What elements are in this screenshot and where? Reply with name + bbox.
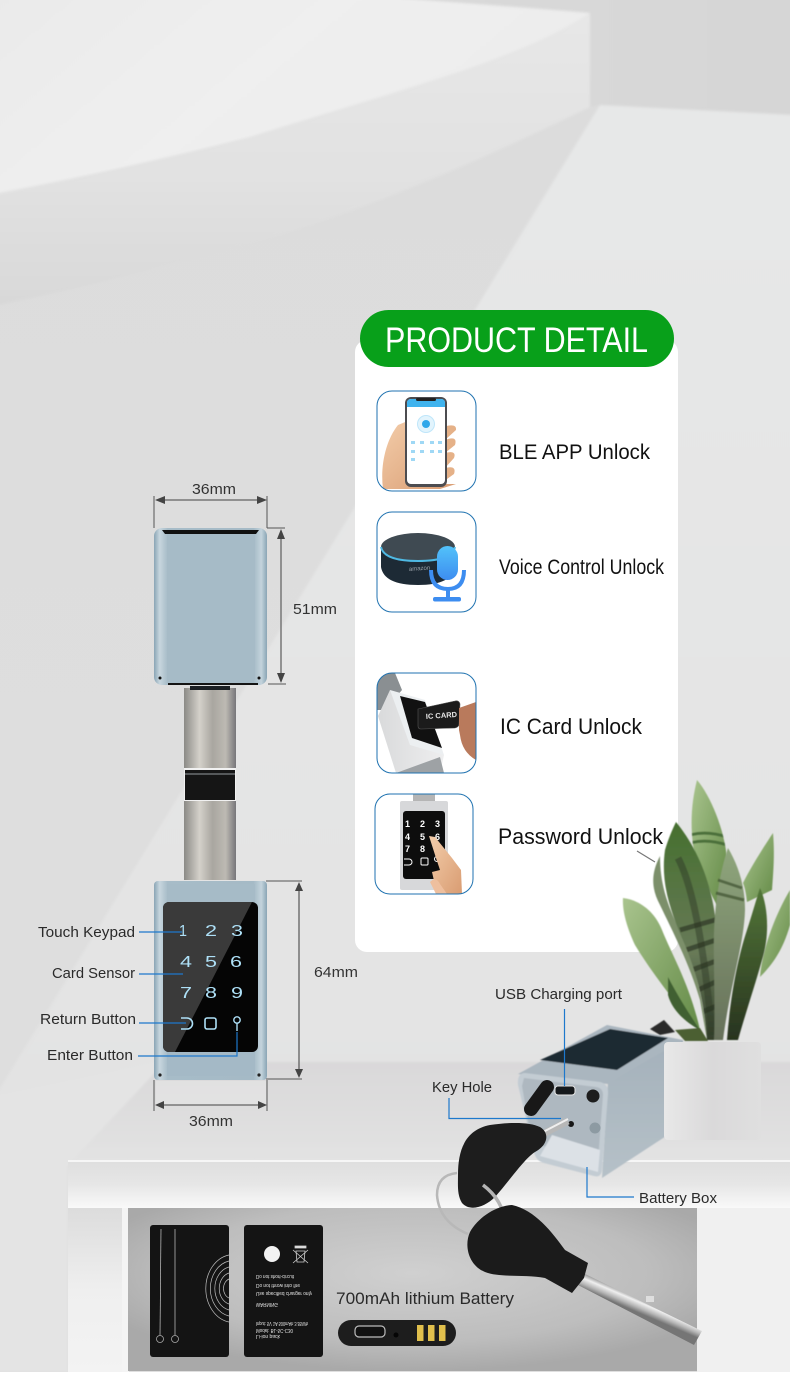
icon: finger on keypad: 6 [435,832,440,842]
Return Button callout: Return Button [40,1011,136,1028]
callout: Battery Box: Battery Box [639,1191,718,1207]
icon: finger on keypad: 3 [435,819,440,829]
keypad lock: upper module, cylinder and lower module [154,528,267,1105]
icon: smart speaker with microphone [377,512,476,612]
dimension: top width 36mm [154,482,267,528]
flip cover handle [531,1087,547,1109]
item: IC card unlock [377,673,643,773]
reset button [586,1090,600,1102]
keypad: 5 [205,954,217,971]
dimension: lower height 64mm: 64mm [314,965,358,981]
panel: table shelf [68,1160,790,1372]
callout: Key Hole [432,1080,561,1118]
keypad: 6 [230,954,242,971]
mirrored battery text: Do not throw into fire [256,1282,300,1288]
icon: card against lock [377,673,476,773]
keypad: 3 [231,923,243,940]
dimension: top width 36mm: 36mm [192,482,236,498]
label: Voice Control Unlock [499,556,664,579]
dimension: lower height 64mm [266,881,358,1079]
body shell [518,1020,683,1178]
Touch Keypad callout: Touch Keypad [38,924,135,941]
Enter Button callout: Enter Button [47,1047,133,1064]
icon: finger on keypad: 1 [405,819,410,829]
upper module [154,528,267,685]
inner ring [483,1185,505,1223]
dimension: bottom width 36mm: 36mm [189,1114,233,1130]
callout: USB Charging port [495,987,622,1086]
mirrored battery text: Input: 5V 1A 500mAh 3.85Wh [256,1320,308,1326]
icon: finger on keypad: 2 [420,819,425,829]
icon: finger on keypad: 4 [405,832,410,842]
keypad: 7 [180,985,192,1002]
label: BLE APP Unlock [499,441,650,464]
mirrored battery text: Model: BL-5C-C30 [256,1327,293,1333]
lock body rear view with keys [437,1020,702,1345]
mirrored battery text: Use specified charger only [256,1290,312,1296]
battery back with recycling mark and mirrored text [244,1225,323,1357]
item: BLE app unlock [377,391,650,491]
label: IC Card Unlock [500,714,643,739]
keypad: 2 [205,923,217,940]
Enter Button callout [47,1032,237,1064]
key ring [437,1173,468,1234]
key hole [568,1121,574,1127]
icon: finger on keypad: 8 [420,844,425,854]
icon: recycling [264,1246,280,1262]
Card Sensor callout [52,965,183,982]
panel: product detail card [355,310,678,952]
mirrored battery text: WARNING [256,1301,278,1307]
cylinder [184,686,236,880]
Card Sensor callout: Card Sensor [52,965,135,982]
battery capacity label: 700mAh lithium Battery [336,1289,515,1308]
keypad: 4 [180,954,192,971]
keypad [163,902,258,1052]
keypad: 1 [179,923,187,940]
front leaves [623,822,767,1041]
label: Password Unlock [498,824,664,849]
keypad: 9 [231,985,243,1002]
key shaft [576,1272,702,1345]
battery end with micro USB and gold contacts [338,1320,456,1346]
dimension: upper height 51mm [267,528,337,684]
icon: card against lock: IC CARD [426,710,458,721]
back leaves [690,780,790,977]
icon: smart speaker with microphone: amazon [409,566,430,573]
heading pill [360,310,674,367]
faint reflection [156,1081,266,1105]
panel: battery backdrop [128,1208,697,1371]
mirrored battery text [256,1273,312,1339]
dimension: bottom width 36mm [154,1080,267,1130]
second key [467,1205,702,1345]
pot [664,1042,761,1140]
icon: finger on keypad: 5 [420,832,425,842]
icon: finger on keypad: 7 [405,844,410,854]
callouts: keypad labels and leader lines [38,924,237,1064]
icon: phone in hand [377,391,476,491]
battery front [150,1225,229,1357]
key head [467,1205,588,1293]
callout: USB Charging port: USB Charging port [495,987,622,1003]
USB port [555,1086,575,1095]
lower module with touch keypad [154,881,267,1080]
icon: finger on keypad [375,794,473,894]
item: password unlock [375,794,664,894]
key in lock [437,1119,568,1234]
item: voice control unlock [377,512,664,612]
icon: crossed bin [293,1246,308,1263]
callout: Battery Box [587,1167,718,1207]
heading pill: PRODUCT DETAIL [385,321,648,360]
dimension: upper height 51mm: 51mm [293,602,337,618]
shaft [543,1121,568,1134]
key head [458,1123,546,1208]
stray leaf tip [637,851,655,862]
mirrored battery text: Do not short-circuit [256,1273,294,1279]
plant [623,780,790,1140]
mirrored battery text: Li-ion pack [256,1333,280,1339]
keypad: 8 [205,985,217,1002]
callout: Key Hole: Key Hole [432,1080,492,1096]
